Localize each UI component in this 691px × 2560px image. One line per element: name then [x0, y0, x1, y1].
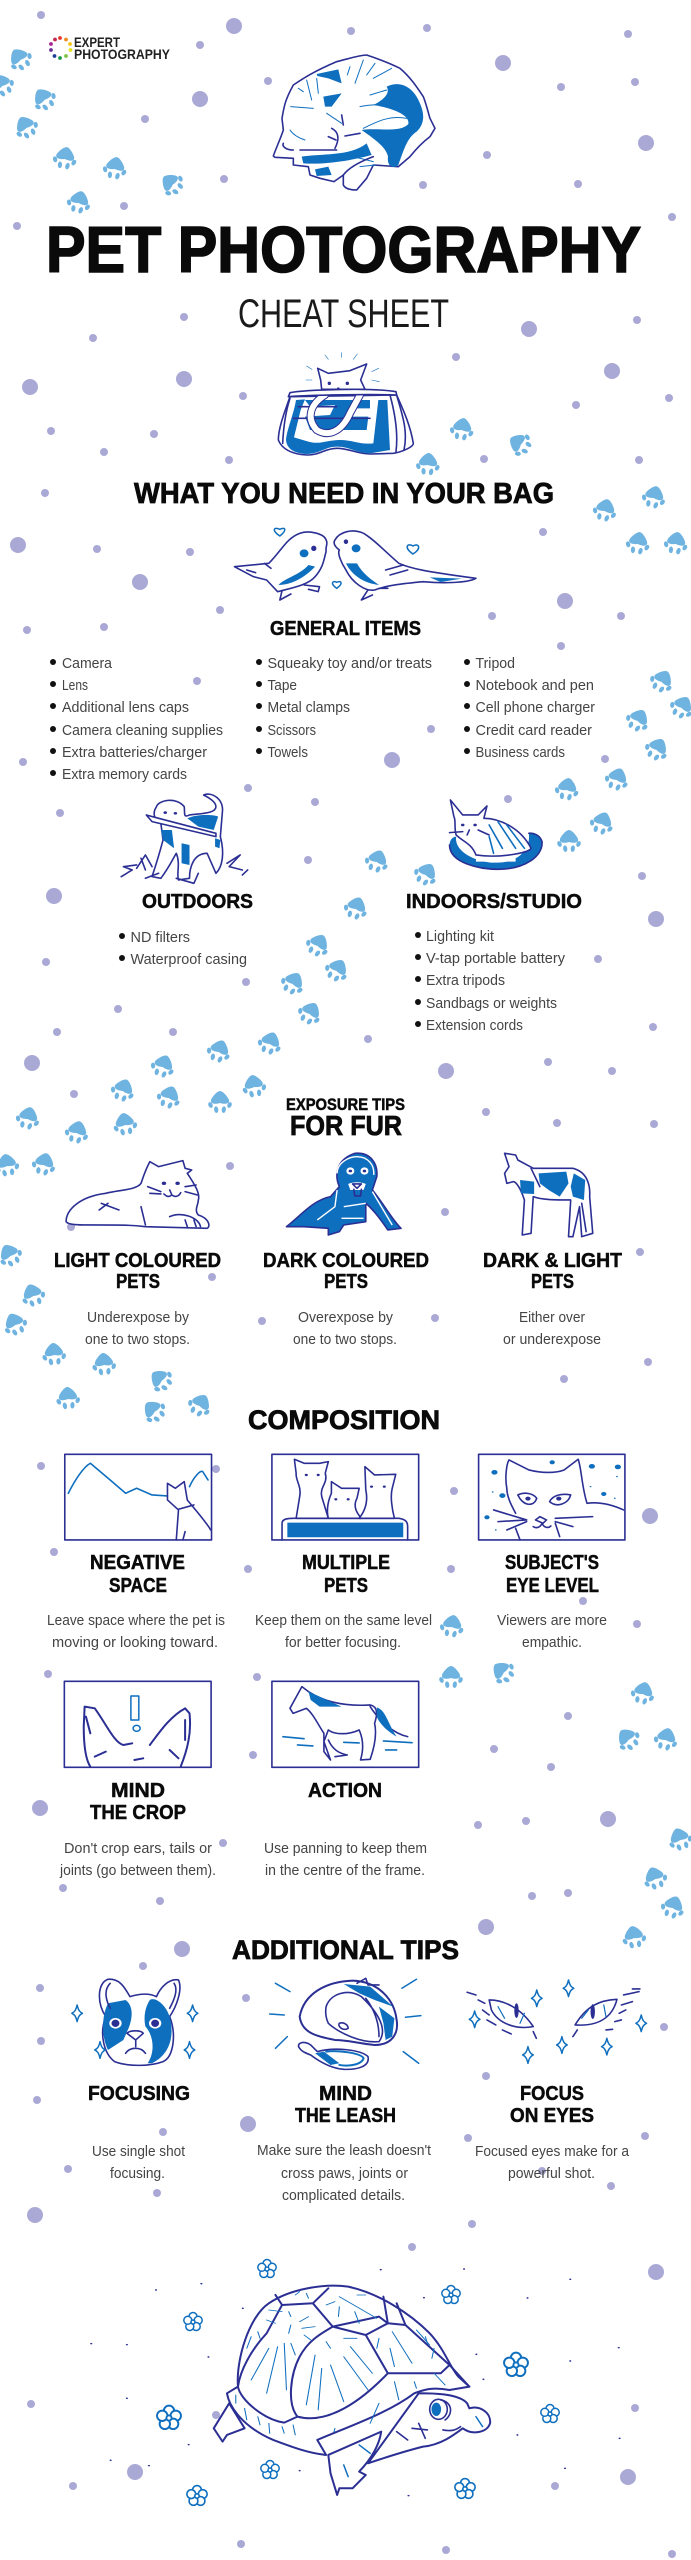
logo: Expert Photography: EXPERT — [74, 34, 120, 50]
heading: focusing: FOCUSING — [88, 2083, 190, 2105]
panel: focusing — [72, 1979, 198, 2182]
heading: negative space — [90, 1552, 185, 1597]
heading: subject's eye level: SUBJECT'S — [505, 1552, 599, 1574]
list: outdoors: Waterproof casing — [130, 951, 247, 968]
list: general items column 2 — [256, 655, 432, 761]
frame illustration: cat face close-up — [479, 1454, 625, 1540]
list: indoors/studio: Lighting kit — [426, 928, 495, 945]
heading: focus on eyes — [510, 2083, 594, 2127]
panel: outdoors — [119, 891, 253, 968]
heading: action: ACTION — [308, 1780, 382, 1802]
text: dark and light advice: or underexpose — [503, 1331, 601, 1348]
list: general items column 2: Squeaky toy and/or treats — [268, 655, 432, 672]
text: focusing tip — [92, 2143, 186, 2182]
list: general items column 1 — [50, 655, 223, 783]
illustration: turtle with flowers — [90, 2260, 621, 2505]
list: general items column 3 — [464, 655, 595, 761]
list: general items column 2: Metal clamps — [268, 699, 350, 716]
heading: dark coloured pets: DARK COLOURED — [263, 1250, 429, 1272]
list: indoors/studio: Sandbags or weights — [426, 995, 557, 1012]
list: general items column 3: Notebook and pen — [476, 677, 594, 694]
heading: dark coloured pets — [263, 1250, 429, 1293]
list: outdoors: ND filters — [130, 929, 190, 946]
heading: exposure tips for fur — [286, 1095, 405, 1141]
text: mind the leash tip: cross paws, joints or — [281, 2165, 408, 2182]
heading: mind the leash: MIND — [319, 2083, 372, 2105]
heading: mind the crop: MIND — [111, 1780, 165, 1802]
list: general items column 1: Camera — [62, 655, 113, 672]
list: general items column 1: Lens — [62, 677, 88, 694]
heading: general items: GENERAL ITEMS — [270, 618, 421, 640]
heading: light coloured pets — [54, 1250, 221, 1293]
text: mind the crop tip — [59, 1840, 216, 1879]
text: dark and light advice — [503, 1309, 601, 1348]
list: general items column 3: Cell phone charger — [476, 699, 595, 716]
text: focusing tip: Use single shot — [92, 2143, 186, 2160]
text: light coloured advice: Underexpose by — [87, 1309, 189, 1326]
heading: composition: COMPOSITION — [248, 1405, 440, 1435]
illustration: retractable leash — [270, 1978, 421, 2069]
text: action tip: Use panning to keep them — [264, 1840, 427, 1857]
subtitle: CHEAT SHEET — [238, 292, 449, 336]
text: multiple pets tip: Keep them on the same level — [255, 1612, 432, 1629]
list: general items column 1: Camera cleaning supplies — [62, 722, 223, 739]
background paw prints — [0, 43, 691, 1950]
illustration: dog with stick — [121, 794, 248, 883]
illustration: sleeping tabby cat — [273, 55, 435, 190]
text: focus on eyes tip — [475, 2143, 630, 2182]
list: general items column 3: Tripod — [476, 655, 515, 672]
list: indoors/studio: Extension cords — [426, 1017, 523, 1034]
panel: negative space — [47, 1454, 225, 1651]
heading: mind the crop: THE CROP — [90, 1802, 186, 1824]
panel: subject's eye level — [479, 1454, 625, 1651]
text: dark coloured advice: Overexpose by — [298, 1309, 393, 1326]
text: action tip — [264, 1840, 427, 1879]
illustration: cat in a bag — [278, 353, 413, 455]
panel: dark coloured pets — [263, 1153, 429, 1348]
panel: action — [264, 1681, 427, 1879]
heading: negative space: SPACE — [109, 1575, 167, 1597]
heading: negative space: NEGATIVE — [90, 1552, 185, 1574]
heading: mind the leash: THE LEASH — [295, 2105, 396, 2127]
heading: multiple pets — [302, 1552, 390, 1597]
frame illustration: dog facing landscape — [65, 1454, 212, 1540]
panel: light coloured pets — [54, 1161, 221, 1348]
panel: multiple pets — [255, 1454, 432, 1651]
heading: multiple pets: PETS — [324, 1575, 368, 1597]
frame illustration: dog ears and exclamation mark — [64, 1681, 211, 1767]
heading: light coloured pets: LIGHT COLOURED — [54, 1250, 221, 1272]
illustration: french bulldog — [72, 1979, 198, 2065]
text: negative space tip — [47, 1612, 225, 1651]
list: indoors/studio: Extra tripods — [426, 972, 505, 989]
text: focusing tip: focusing. — [110, 2165, 165, 2182]
text: light coloured advice — [85, 1309, 190, 1348]
heading: multiple pets: MULTIPLE — [302, 1552, 390, 1574]
text: multiple pets tip — [255, 1612, 432, 1651]
text: multiple pets tip: for better focusing. — [285, 1634, 401, 1651]
text: dark coloured advice — [293, 1309, 397, 1348]
list: general items column 3: Business cards — [476, 744, 565, 761]
heading: indoors/studio: INDOORS/STUDIO — [406, 891, 582, 913]
heading: what you need in your bag: WHAT YOU NEED IN YOUR BAG — [134, 478, 554, 510]
panel: indoors/studio — [406, 891, 582, 1034]
logo: Expert Photography — [49, 34, 171, 62]
text: mind the crop tip: Don't crop ears, tails or — [64, 1840, 212, 1857]
heading: subject's eye level: EYE LEVEL — [506, 1575, 599, 1597]
heading: mind the leash — [295, 2083, 396, 2127]
text: subject's eye level tip: empathic. — [522, 1634, 582, 1651]
text: subject's eye level tip — [497, 1612, 607, 1651]
list: general items column 1: Additional lens caps — [62, 699, 189, 716]
illustration: dark puppy — [286, 1153, 401, 1235]
logo: Expert Photography: PHOTOGRAPHY — [74, 46, 171, 62]
illustration: fluffy white cat — [66, 1161, 209, 1228]
text: dark and light advice: Either over — [519, 1309, 585, 1326]
heading: dark and light pets: DARK & LIGHT — [483, 1250, 622, 1272]
illustration: cat eyes with sparkles — [467, 1980, 647, 2063]
text: negative space tip: Leave space where the pet is — [47, 1612, 225, 1629]
heading: light coloured pets: PETS — [116, 1271, 160, 1293]
heading: dark coloured pets: PETS — [324, 1271, 368, 1293]
text: mind the crop tip: joints (go between them). — [59, 1862, 216, 1879]
text: dark coloured advice: one to two stops. — [293, 1331, 397, 1348]
panel: focus on eyes — [467, 1980, 647, 2182]
list: general items column 2: Tape — [268, 677, 297, 694]
heading: focus on eyes: ON EYES — [510, 2105, 594, 2127]
text: mind the leash tip: complicated details. — [282, 2187, 405, 2204]
frame illustration: three kittens on a bed — [272, 1454, 419, 1540]
title: PET PHOTOGRAPHY — [46, 213, 641, 286]
heading: focus on eyes: FOCUS — [520, 2083, 584, 2105]
list: general items column 2: Scissors — [268, 722, 316, 739]
frame illustration: running horse — [272, 1681, 419, 1767]
illustration: budgies and hearts — [234, 528, 476, 600]
text: mind the leash tip: Make sure the leash doesn't — [257, 2142, 432, 2159]
text: focus on eyes tip: powerful shot. — [508, 2165, 595, 2182]
heading: subject's eye level — [505, 1552, 599, 1597]
list: indoors/studio — [415, 928, 565, 1034]
panel: general items — [50, 618, 595, 783]
panel: mind the crop — [59, 1681, 216, 1879]
text: focus on eyes tip: Focused eyes make for a — [475, 2143, 630, 2160]
list: general items column 1: Extra memory cards — [62, 766, 187, 783]
heading: exposure tips for fur: FOR FUR — [290, 1110, 402, 1141]
list: outdoors — [119, 929, 247, 968]
heading: dark and light pets — [483, 1250, 622, 1293]
list: general items column 1: Extra batteries/charger — [62, 744, 207, 761]
text: light coloured advice: one to two stops. — [85, 1331, 190, 1348]
heading: outdoors: OUTDOORS — [142, 891, 253, 913]
heading: mind the crop — [90, 1780, 186, 1824]
heading: exposure tips for fur: EXPOSURE TIPS — [286, 1095, 405, 1114]
text: subject's eye level tip: Viewers are more — [497, 1612, 607, 1629]
text: mind the leash tip — [257, 2142, 432, 2204]
text: negative space tip: moving or looking toward. — [52, 1634, 218, 1651]
list: general items column 2: Towels — [268, 744, 308, 761]
heading: dark and light pets: PETS — [531, 1271, 574, 1293]
illustration: piebald horse — [505, 1153, 593, 1237]
illustration: cat in bed — [450, 800, 542, 869]
list: indoors/studio: V-tap portable battery — [426, 950, 565, 967]
heading: additional tips: ADDITIONAL TIPS — [232, 1935, 459, 1965]
list: general items column 3: Credit card reader — [476, 722, 592, 739]
text: action tip: in the centre of the frame. — [265, 1862, 425, 1879]
panel: mind the leash — [257, 1978, 432, 2204]
panel: dark and light pets — [483, 1153, 622, 1348]
